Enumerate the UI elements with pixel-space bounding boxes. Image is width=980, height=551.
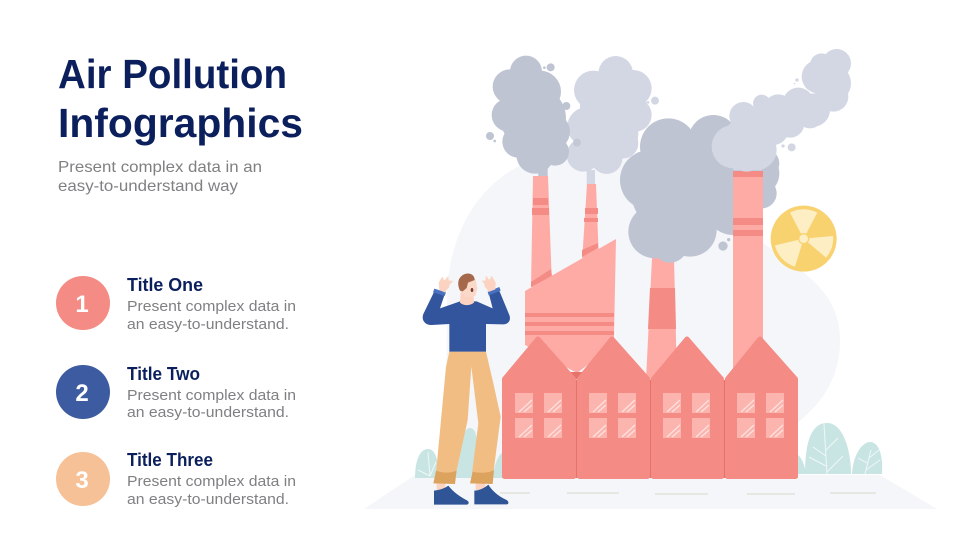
item 2 text [127,364,296,421]
title: Air Pollution [58,51,287,97]
factory houses [504,339,796,478]
mouth [471,288,473,292]
item 2 text: Present complex data in [127,388,296,404]
number badge 2: 2 [75,380,89,407]
house 4 [728,339,796,476]
illustration: ground [364,475,937,509]
chimney 2 [582,184,599,262]
title: Infographics [58,100,303,146]
right hand [482,276,496,292]
house 1 [504,339,574,476]
sweater cuffs [433,287,501,296]
item 1 [56,275,296,333]
neck [460,292,474,305]
face [461,278,477,297]
smoke cloud 1 [486,56,570,177]
chimney 1 [531,176,552,287]
subtitle: Present complex data in an [58,159,262,176]
plants left [415,428,503,478]
subtitle [58,159,262,195]
smoke cloud 3 [620,115,779,263]
item 1 text: Title One [127,275,203,295]
house 3 [654,339,722,476]
item 2 text: an easy-to-understand. [127,405,289,421]
item 2 [56,364,296,421]
trousers [436,352,501,473]
illustration: background blob [447,150,840,480]
number badge 1 [56,276,110,330]
ankles [437,482,485,490]
sweater [423,288,510,352]
title [58,51,303,146]
house 2 [580,339,648,476]
item 3 text: Present complex data in [127,474,296,490]
subtitle: easy-to-understand way [58,178,238,195]
smoke cloud 2 [567,56,659,185]
item 3 text: Title Three [127,450,213,470]
smoke cloud 4 [712,49,851,172]
number badge 2 [56,365,110,419]
item 3 text: an easy-to-understand. [127,492,289,508]
shoes [434,485,508,505]
item 1 text [127,275,296,333]
number badge 3: 3 [75,467,89,494]
item 1 text: Present complex data in [127,299,296,315]
number badge 3 [56,452,110,506]
item 1 text: an easy-to-understand. [127,317,289,333]
hair [458,274,475,291]
person [423,274,510,505]
chimney 3 [646,258,677,380]
left hand [439,276,453,293]
chimney 4 [733,171,763,371]
number badge 1: 1 [75,291,89,318]
item 2 text: Title Two [127,364,200,384]
radiation hazard sign [771,206,837,272]
item 3 [56,450,296,508]
factory hall [525,239,616,373]
plants right [798,423,882,474]
item 3 text [127,450,296,508]
trouser cuffs [433,470,494,484]
